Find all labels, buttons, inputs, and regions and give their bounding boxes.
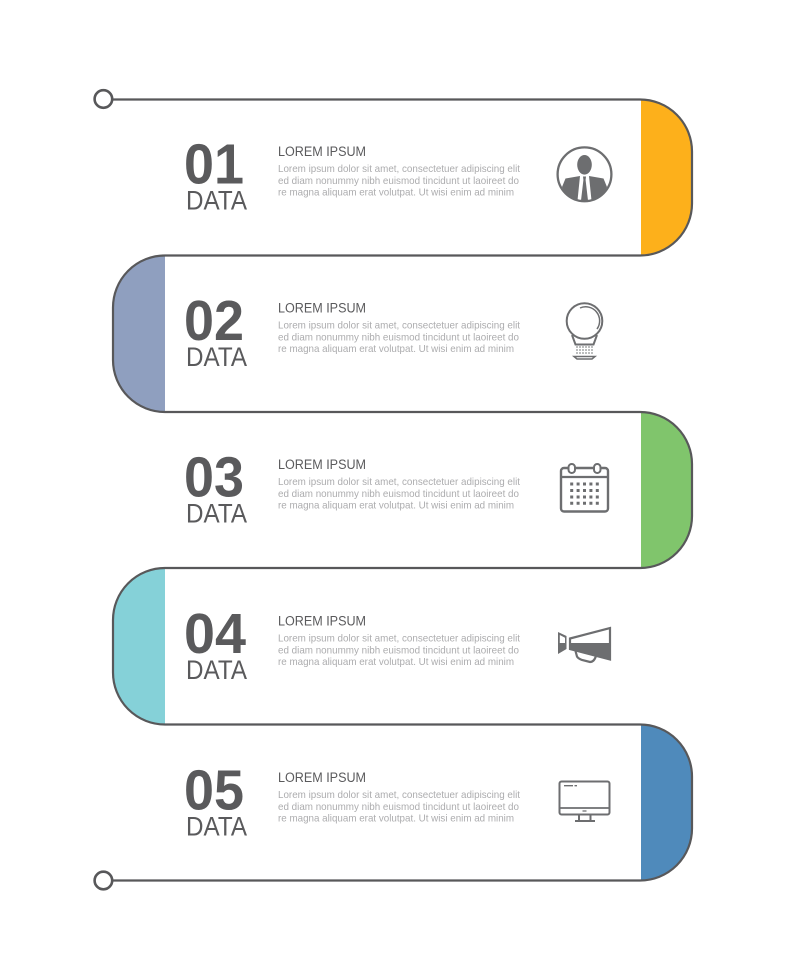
step 05 text: ed diam nonummy nibh euismod tincidunt ut laoireet do bbox=[278, 801, 519, 813]
step 04 text bbox=[184, 602, 520, 685]
icon: businessman bbox=[558, 147, 611, 201]
serpentine connector line bbox=[112, 100, 692, 880]
step 03 text: LOREM IPSUM bbox=[278, 457, 366, 472]
step 02 text: re magna aliquam erat volutpat. Ut wisi enim ad minim bbox=[278, 343, 514, 355]
end circle marker bbox=[95, 872, 112, 889]
icon: light bulb bbox=[567, 303, 602, 359]
color tab 4 teal bbox=[113, 568, 165, 724]
step 03 text bbox=[184, 446, 520, 528]
start circle marker bbox=[95, 90, 112, 108]
step 01 text: DATA bbox=[186, 186, 247, 216]
step 03 text: ed diam nonummy nibh euismod tincidunt ut laoireet do bbox=[278, 488, 519, 500]
step 04 text: re magna aliquam erat volutpat. Ut wisi enim ad minim bbox=[278, 656, 514, 668]
step 05 text bbox=[184, 758, 520, 842]
color tab 3 green bbox=[640, 412, 692, 568]
step 05 text: 05 bbox=[184, 758, 244, 822]
step 01 text: ed diam nonummy nibh euismod tincidunt ut laoireet do bbox=[278, 175, 519, 187]
step 03 text: 03 bbox=[184, 446, 244, 510]
color tab 1 orange bbox=[640, 100, 692, 256]
icon: desktop monitor bbox=[560, 782, 610, 821]
step 03 text: DATA bbox=[186, 498, 247, 528]
step 03 text: Lorem ipsum dolor sit amet, consectetuer adipiscing elit bbox=[278, 476, 520, 488]
icon: calendar bbox=[561, 464, 608, 512]
step 02 text bbox=[184, 289, 520, 372]
color tab 2 slate blue bbox=[113, 256, 165, 412]
step 05 text: Lorem ipsum dolor sit amet, consectetuer adipiscing elit bbox=[278, 789, 520, 801]
step 03 text: re magna aliquam erat volutpat. Ut wisi enim ad minim bbox=[278, 500, 514, 512]
step 02 text: LOREM IPSUM bbox=[278, 300, 366, 316]
color tab 5 blue bbox=[640, 724, 692, 880]
step 05 text: LOREM IPSUM bbox=[278, 770, 366, 785]
step 04 text: LOREM IPSUM bbox=[278, 614, 366, 628]
step 01 text: re magna aliquam erat volutpat. Ut wisi enim ad minim bbox=[278, 187, 514, 199]
step 01 text: 01 bbox=[184, 132, 244, 196]
step 04 text: Lorem ipsum dolor sit amet, consectetuer adipiscing elit bbox=[278, 632, 520, 644]
icon: megaphone bbox=[558, 628, 610, 662]
step 04 text: ed diam nonummy nibh euismod tincidunt ut laoireet do bbox=[278, 644, 519, 656]
step 02 text: ed diam nonummy nibh euismod tincidunt ut laoireet do bbox=[278, 331, 519, 343]
step 05 text: re magna aliquam erat volutpat. Ut wisi enim ad minim bbox=[278, 813, 514, 825]
step 01 text: Lorem ipsum dolor sit amet, consectetuer adipiscing elit bbox=[278, 163, 520, 175]
step 01 text bbox=[184, 132, 520, 216]
step 04 text: DATA bbox=[186, 655, 247, 685]
step 01 text: LOREM IPSUM bbox=[278, 144, 366, 159]
step 04 text: 04 bbox=[184, 602, 246, 666]
step 02 text: 02 bbox=[184, 289, 244, 353]
step 02 text: DATA bbox=[186, 342, 247, 372]
step 02 text: Lorem ipsum dolor sit amet, consectetuer adipiscing elit bbox=[278, 320, 520, 332]
step 05 text: DATA bbox=[186, 812, 247, 842]
